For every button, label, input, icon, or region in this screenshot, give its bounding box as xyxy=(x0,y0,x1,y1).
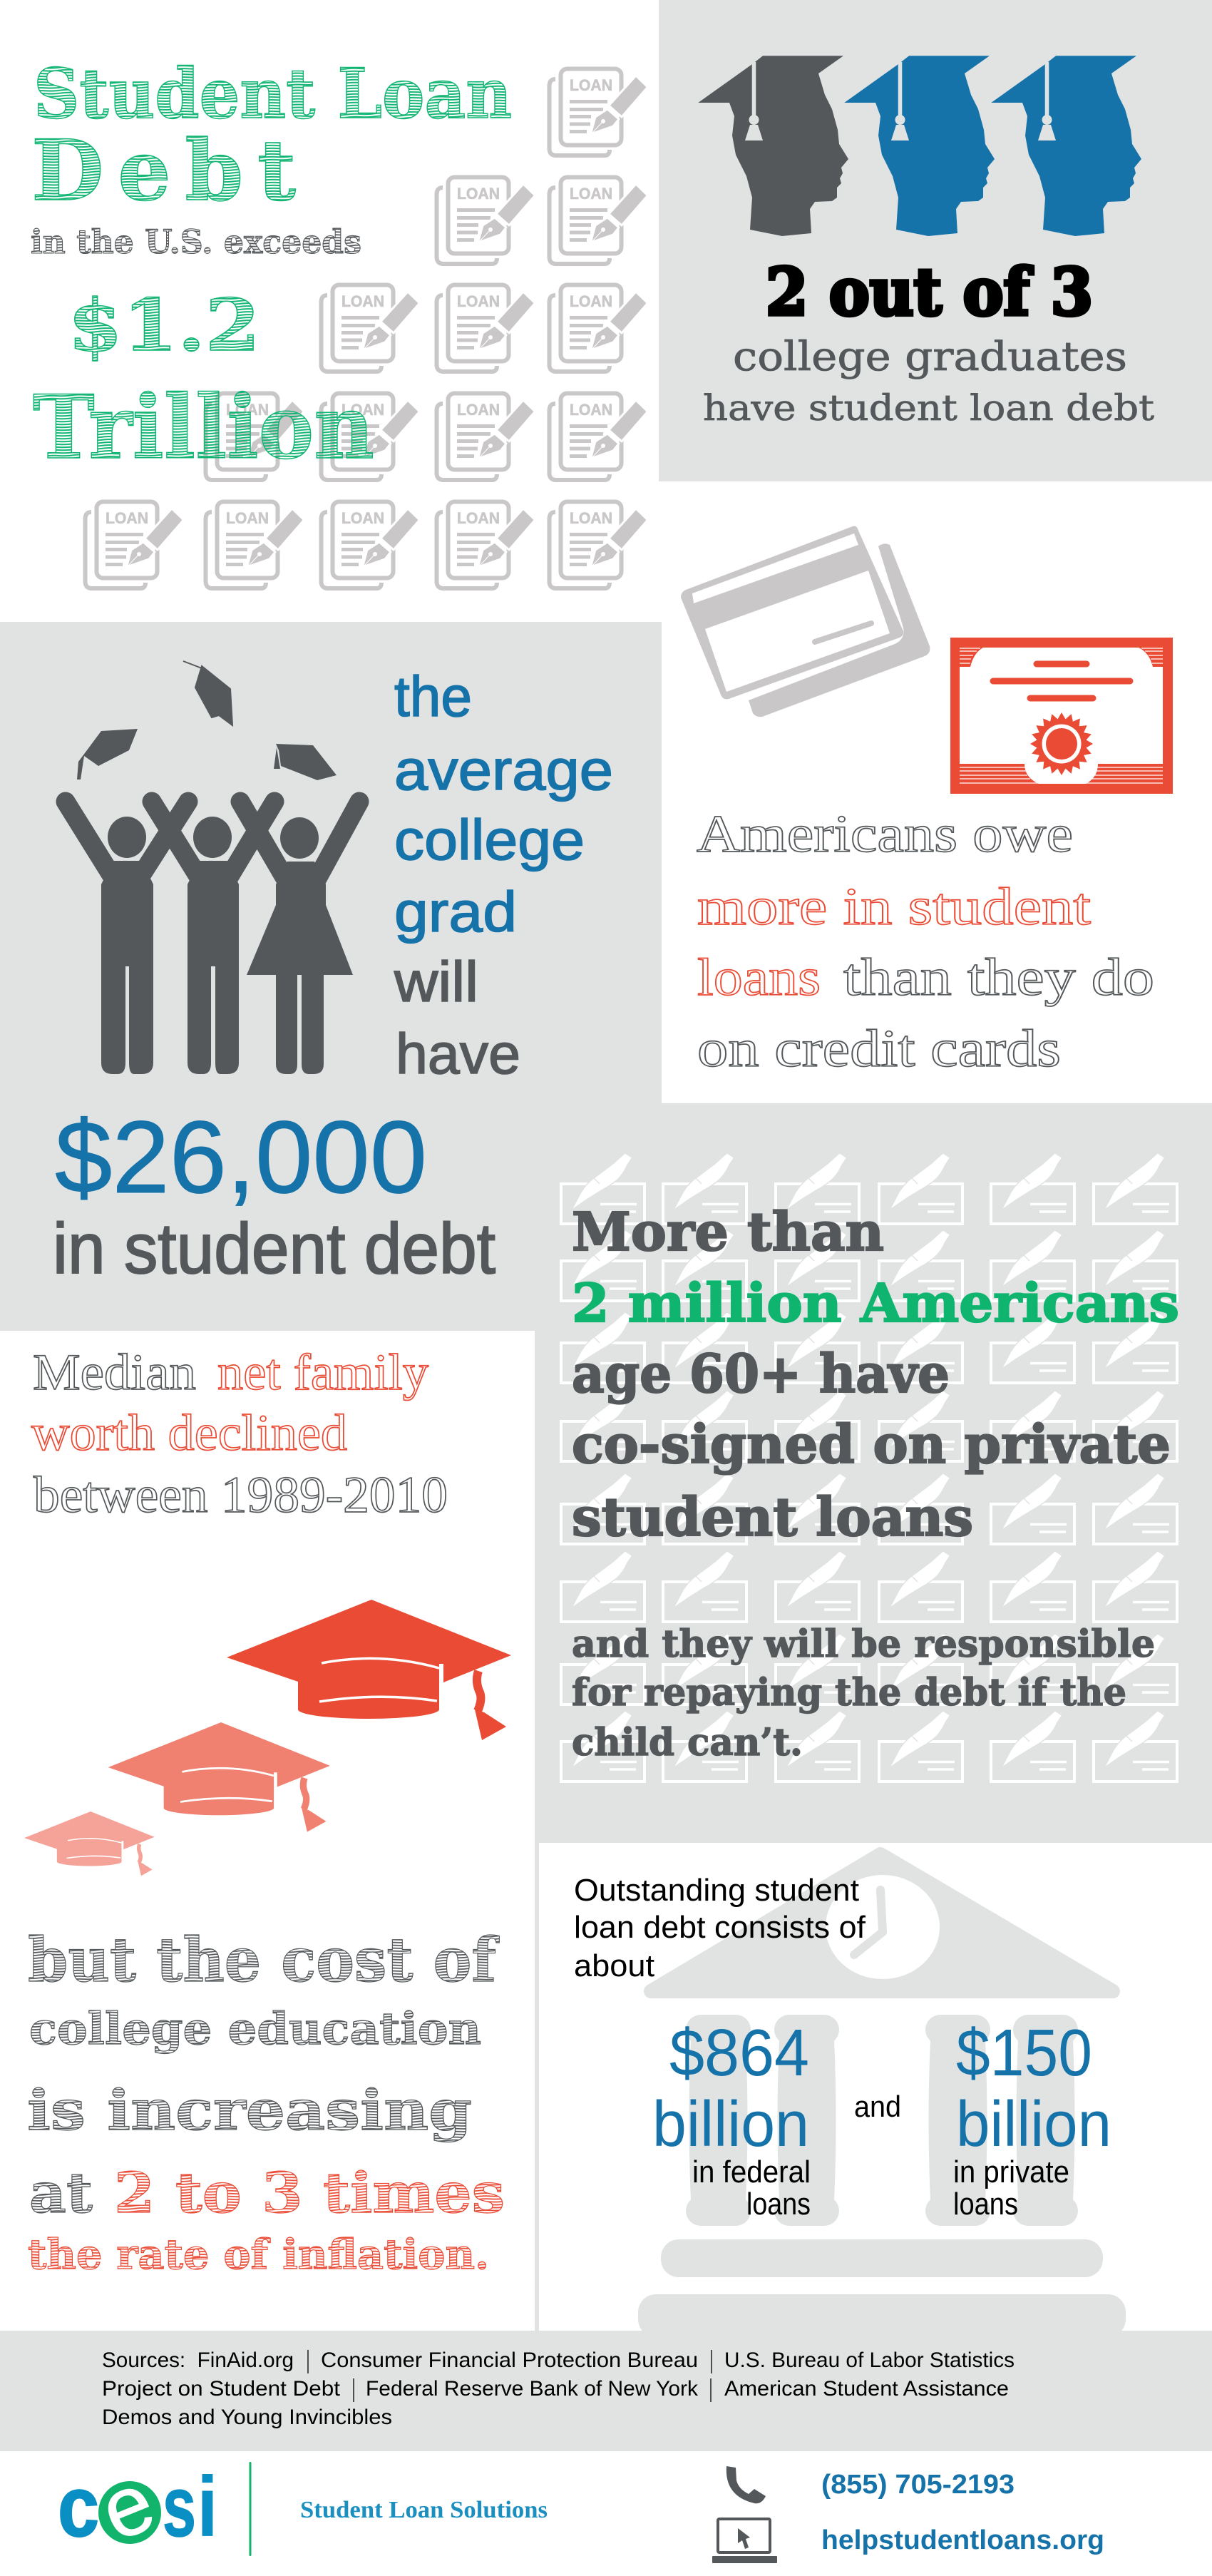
statement text: the xyxy=(394,665,472,728)
figure: private loans: billion xyxy=(956,2089,1111,2160)
supporting statement: for repaying the debt if the xyxy=(572,1671,1126,1714)
icon group: loan documents: LOAN xyxy=(457,509,500,527)
statement: median net family worth: between 1989-2010 xyxy=(34,1466,448,1523)
icon: diploma xyxy=(950,638,1173,794)
icon: phone xyxy=(726,2466,766,2503)
icon: bank building xyxy=(638,1854,1126,2337)
statistic text: have student loan debt xyxy=(703,387,1154,429)
statement text xyxy=(394,665,613,1085)
icon: credit cards xyxy=(681,526,930,717)
panel: credit cards versus student loans xyxy=(681,526,1173,1078)
icon group: loan documents: LOAN xyxy=(570,401,612,419)
logo: cesi: s xyxy=(163,2459,196,2555)
icon group: loan documents: LOAN xyxy=(341,509,384,527)
icon group: loan documents: LOAN xyxy=(457,292,500,310)
title: $1.2 xyxy=(68,283,260,367)
figure: federal loans: loans xyxy=(746,2187,811,2222)
statement text: Americans owe xyxy=(697,805,1073,864)
statement text: loans xyxy=(697,949,821,1007)
phone number: (855) 705-2193 xyxy=(821,2470,1015,2500)
title: Debt xyxy=(31,121,296,220)
panel: co-signers age 60+ xyxy=(561,1153,1179,1782)
panel: average college grad debt xyxy=(53,661,613,1289)
statement text: have xyxy=(396,1022,520,1085)
statement: cost of college xyxy=(27,1925,505,2279)
figure: private loans: in private xyxy=(953,2155,1069,2189)
intro text: about xyxy=(574,1948,654,1983)
statement: median net family worth: worth declined xyxy=(31,1404,347,1461)
logo: cesi xyxy=(58,2454,218,2559)
icon group: loan documents: LOAN xyxy=(570,185,612,203)
icon group: loan documents: LOAN xyxy=(570,292,612,310)
sources xyxy=(102,2348,1015,2429)
figure: private loans xyxy=(953,2015,1111,2222)
icon: graduate heads xyxy=(698,56,1141,236)
tagline: Student Loan Solutions xyxy=(300,2497,548,2523)
sources: Project on Student Debt xyxy=(102,2377,341,2401)
title: Student Loan xyxy=(34,53,512,134)
icon group: loan documents: LOAN xyxy=(570,509,612,527)
intro text: Outstanding student xyxy=(574,1873,859,1908)
headline statement: co-signed on private xyxy=(572,1414,1171,1476)
icon group: loan documents: LOAN xyxy=(457,185,500,203)
headline statement xyxy=(572,1202,1179,1548)
statement: cost of college: at xyxy=(29,2161,93,2226)
statement: median net family worth xyxy=(31,1344,448,1523)
panel: student loan debt headline xyxy=(31,53,647,588)
icon: growing graduation caps xyxy=(24,1600,511,1876)
figure: $26,000: $26,000 xyxy=(55,1100,427,1215)
sources: U.S. Bureau of Labor Statistics xyxy=(724,2348,1015,2372)
statement: cost of college: 2 to 3 times xyxy=(114,2161,505,2226)
footer xyxy=(58,2454,1104,2563)
intro text: loan debt consists of xyxy=(574,1910,866,1945)
title xyxy=(31,53,512,479)
connector word: and: and xyxy=(854,2090,901,2123)
intro text xyxy=(574,1873,866,1983)
statistic text: college graduates xyxy=(733,334,1127,380)
title: Trillion xyxy=(33,377,374,479)
headline statement: age 60+ have xyxy=(572,1344,950,1405)
statement: median net family worth: net family xyxy=(217,1344,428,1401)
headline statement: 2 million Americans xyxy=(572,1273,1179,1334)
logo: cesi: c xyxy=(58,2459,99,2555)
panel: net worth versus cost of college xyxy=(24,1344,511,2279)
supporting statement: and they will be responsible xyxy=(572,1622,1155,1666)
statement: median net family worth: Median xyxy=(33,1344,196,1401)
icon group: loan documents xyxy=(86,68,647,588)
headline statement: student loans xyxy=(572,1487,973,1548)
sources: Sources: FinAid.org xyxy=(102,2348,294,2372)
statement: cost of college: college education xyxy=(29,2003,481,2055)
statement text: grad xyxy=(394,880,517,944)
figure: federal loans: $864 xyxy=(669,2015,809,2090)
statement text: average xyxy=(394,738,613,802)
icon: thrown caps xyxy=(77,661,337,780)
headline statement: More than xyxy=(572,1202,884,1263)
sources: American Student Assistance xyxy=(724,2377,1009,2401)
statement text: on credit cards xyxy=(697,1020,1061,1078)
figure: private loans: $150 xyxy=(956,2015,1092,2090)
statistic text: 2 out of 3 xyxy=(766,255,1093,330)
statement: cost of college: is increasing xyxy=(27,2078,472,2143)
figure: federal loans: in federal xyxy=(692,2155,811,2189)
icon: three graduates throwing caps xyxy=(66,661,359,1074)
icon group: loan documents: LOAN xyxy=(106,509,148,527)
icon group: loan documents: LOAN xyxy=(341,401,384,419)
logo: cesi: i xyxy=(197,2459,218,2555)
caption: in student debt: in student debt xyxy=(53,1209,495,1289)
statement text: will xyxy=(394,950,478,1013)
panel: 2 out of 3 graduates xyxy=(698,56,1154,429)
icon group: loan documents: LOAN xyxy=(226,509,269,527)
sources: Federal Reserve Bank of New York xyxy=(366,2377,699,2401)
panel: outstanding debt breakdown xyxy=(574,1854,1126,2337)
logo: cesi: e xyxy=(88,2454,167,2559)
icon group: loan documents: LOAN xyxy=(457,401,500,419)
supporting statement: child can’t. xyxy=(572,1721,803,1764)
figure: private loans: loans xyxy=(953,2187,1018,2222)
sources: Demos and Young Invincibles xyxy=(102,2406,392,2429)
background pattern: cheques and pens xyxy=(561,1153,1177,1782)
statement text: college xyxy=(394,808,585,872)
supporting statement xyxy=(572,1622,1155,1764)
statement text: than they do xyxy=(843,949,1154,1007)
icon group: loan documents: LOAN xyxy=(341,292,384,310)
figure: federal loans: billion xyxy=(652,2089,809,2160)
statement text: more in student xyxy=(697,878,1092,936)
sources: Consumer Financial Protection Bureau xyxy=(321,2348,698,2372)
figure: federal loans xyxy=(652,2015,811,2222)
statement text xyxy=(697,805,1154,1078)
icon group: loan documents: LOAN xyxy=(226,401,269,419)
statement: cost of college: the rate of inflation. xyxy=(28,2230,489,2279)
website: helpstudentloans.org xyxy=(821,2525,1104,2555)
figures xyxy=(66,802,359,1074)
icon: laptop xyxy=(712,2519,777,2563)
icon group: loan documents: LOAN xyxy=(570,76,612,94)
statement: cost of college: but the cost of xyxy=(28,1925,500,1996)
title: in the U.S. exceeds xyxy=(31,223,361,261)
statistic text xyxy=(703,255,1154,429)
